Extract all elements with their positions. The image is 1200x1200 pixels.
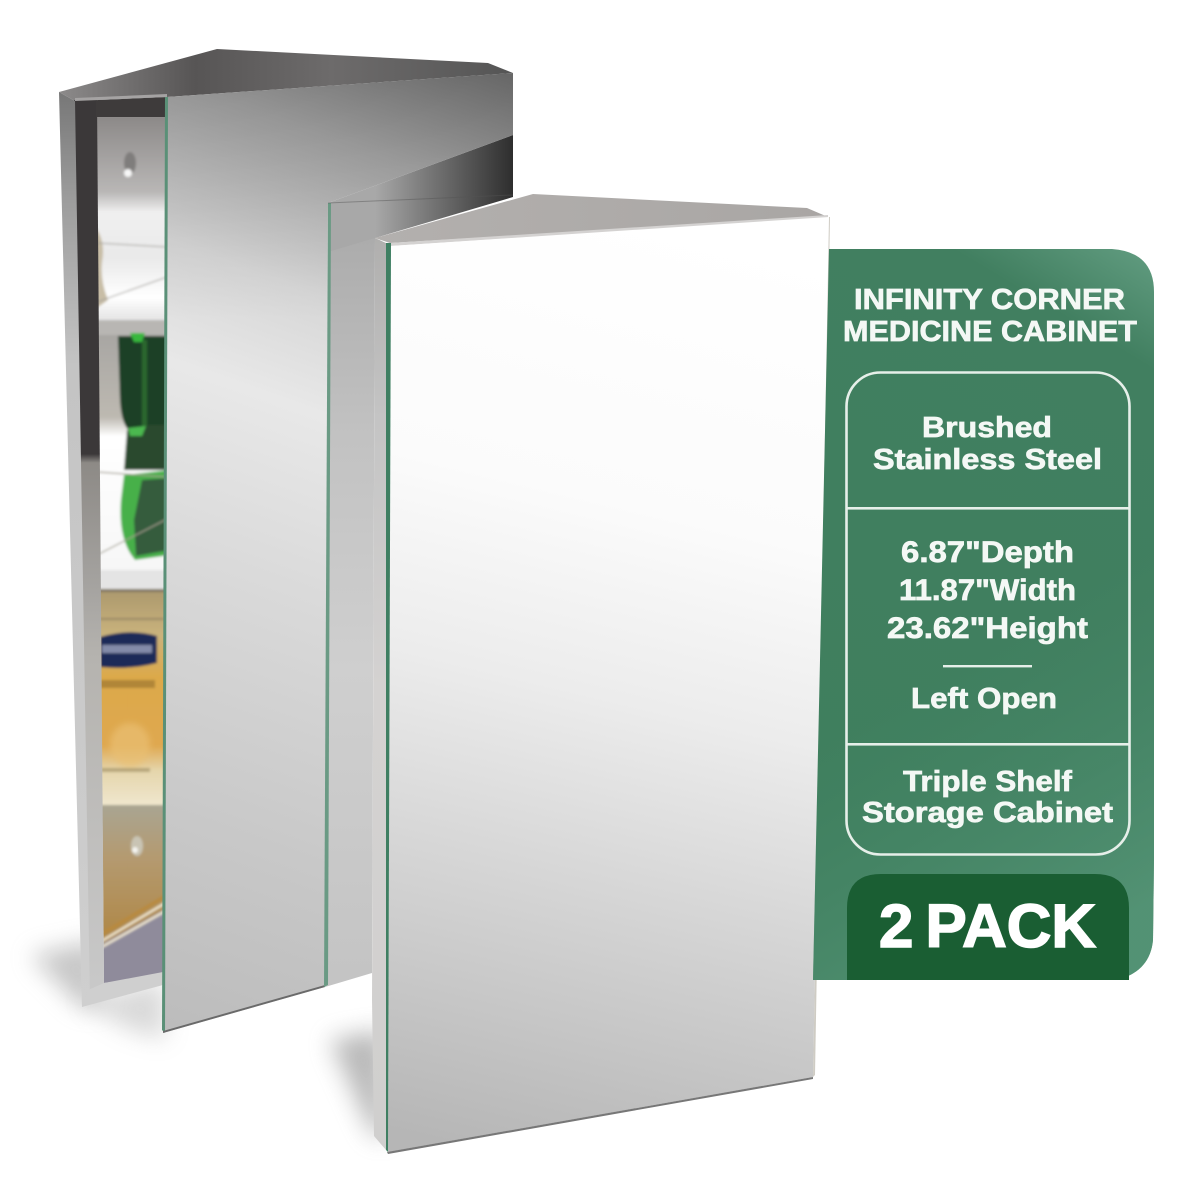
icon: mounting screw top bbox=[124, 152, 136, 177]
specs box bbox=[846, 372, 1130, 854]
second cabinet top reflection bbox=[328, 135, 513, 252]
material text bbox=[873, 412, 1102, 476]
2 pack badge: 2 PACK bbox=[879, 892, 1096, 960]
cabinet top face bbox=[59, 49, 513, 101]
front cabinet side strip bbox=[372, 238, 386, 1150]
mirror door open bbox=[162, 73, 513, 1033]
dimensions text bbox=[887, 536, 1088, 645]
icon: mounting screw bottom bbox=[131, 836, 143, 856]
heading: INFINITY CORNER bbox=[854, 284, 1125, 316]
panel: product specifications bbox=[813, 249, 1154, 980]
dimensions text: 11.87"Width bbox=[899, 574, 1076, 607]
lotion bottle bbox=[100, 590, 164, 806]
front cabinet top face bbox=[375, 194, 828, 243]
panel background bbox=[813, 249, 1154, 980]
green bottle bbox=[118, 333, 170, 560]
heading bbox=[843, 284, 1137, 348]
material text: Stainless Steel bbox=[873, 444, 1102, 476]
storage text: Triple Shelf bbox=[903, 766, 1072, 798]
2 pack badge bbox=[847, 874, 1129, 980]
door opening text: Left Open bbox=[911, 683, 1057, 715]
floor shadows bbox=[30, 940, 385, 1140]
cabinet interior with shelves bbox=[97, 117, 165, 983]
dimensions text: 23.62"Height bbox=[887, 612, 1088, 645]
material text: Brushed bbox=[922, 412, 1052, 444]
front cabinet mirror bbox=[388, 217, 829, 1152]
storage text: Storage Cabinet bbox=[862, 797, 1113, 829]
storage text bbox=[862, 766, 1113, 829]
second cabinet corner line bbox=[328, 195, 513, 203]
second cabinet side bbox=[325, 195, 513, 987]
heading: MEDICINE CABINET bbox=[843, 316, 1137, 348]
dimensions text: 6.87"Depth bbox=[901, 536, 1074, 569]
cabinet frame left and bottom bbox=[59, 92, 167, 1007]
front cabinet bbox=[372, 194, 830, 1154]
